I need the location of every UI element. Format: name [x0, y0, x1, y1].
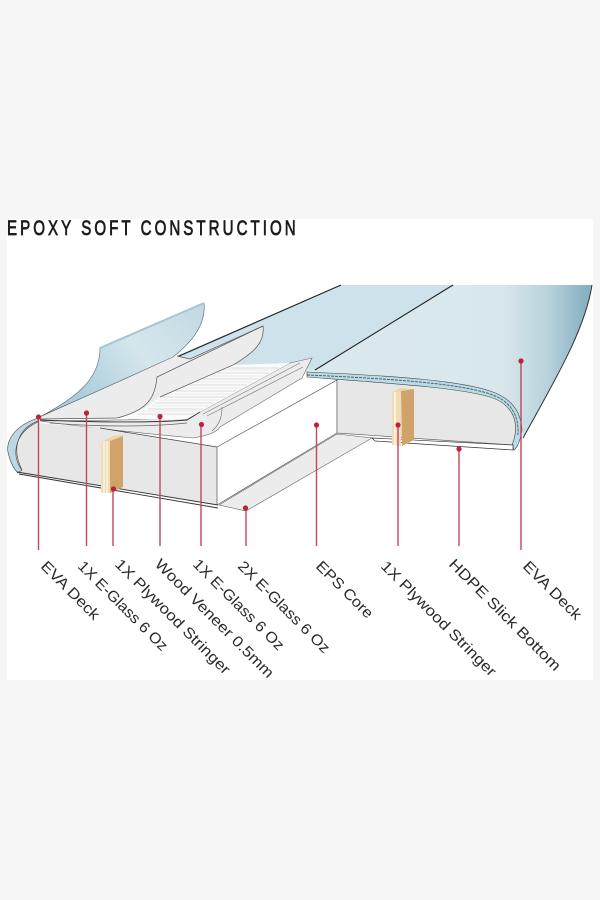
title: EPOXY SOFT CONSTRUCTION: [7, 215, 296, 240]
right plywood stringer: [392, 388, 414, 446]
slick bottom: [372, 438, 513, 450]
right front face: [337, 380, 517, 445]
lifted left deck flap: [40, 303, 204, 417]
label: 1X E-Glass 6 Oz second: 1X E-Glass 6 Oz: [189, 556, 287, 654]
left nose and laminate: [8, 418, 38, 473]
labels: [37, 556, 585, 682]
left front face: [13, 423, 217, 505]
deck edge lines: [40, 285, 341, 417]
bottom glass strip: [219, 434, 372, 511]
label: EVA Deck right: EVA Deck: [519, 558, 585, 624]
upper E-glass sheet: [40, 326, 263, 419]
label: EVA Deck left: EVA Deck: [37, 558, 103, 624]
middle blue area: [176, 285, 453, 370]
label: HDPE Slick Bottom: HDPE Slick Bottom: [445, 556, 564, 675]
label: 2X E-Glass 6 Oz: 2X E-Glass 6 Oz: [234, 558, 333, 657]
lower E-glass sheet: [40, 358, 312, 438]
board cross-section diagram: [8, 285, 592, 511]
label: 1X Plywood Stringer: 1X Plywood Stringer: [111, 556, 234, 678]
right deck surface: [300, 285, 592, 438]
label: 1X E-Glass 6 Oz: 1X E-Glass 6 Oz: [74, 558, 171, 655]
white panel: [7, 219, 593, 680]
red leader lines and dots: [36, 358, 524, 550]
label: Wood Veneer: Wood Veneer 0.5mm: [151, 556, 277, 682]
left bottom laminate: [17, 472, 218, 508]
right laminate edge: [307, 372, 522, 450]
label: EPS Core: EPS Core: [312, 558, 377, 622]
core side face: [217, 380, 337, 505]
left plywood stringer: [101, 435, 123, 493]
wood veneer stripes: [117, 363, 290, 420]
label: 1X Plywood Stringer right: 1X Plywood Stringer: [377, 558, 500, 680]
